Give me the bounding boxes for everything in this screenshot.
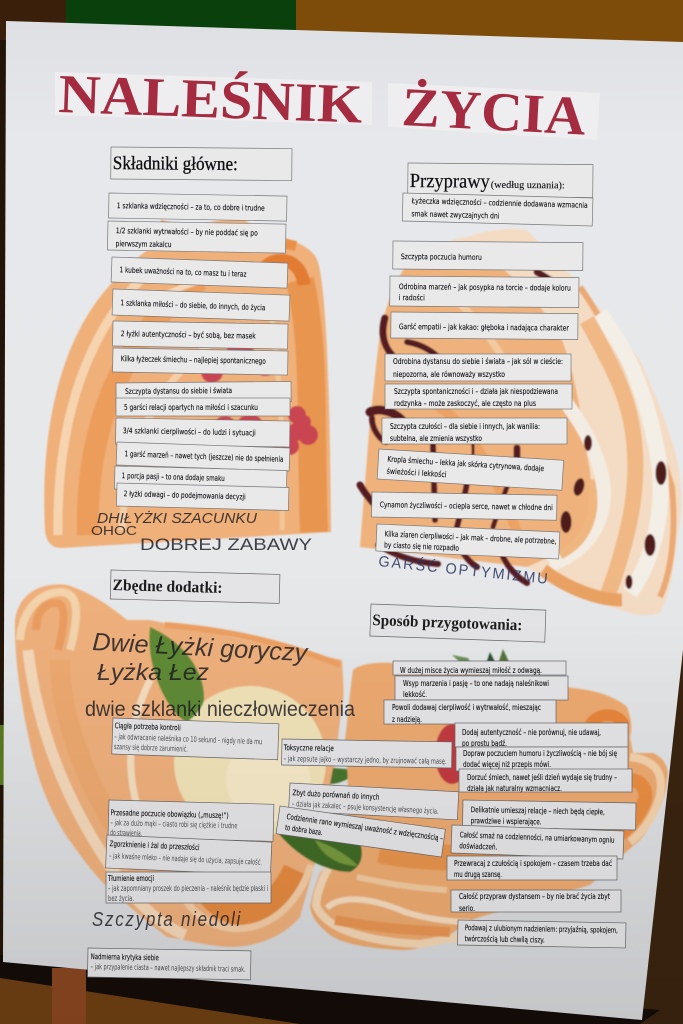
list of bad additions: – jak kwaśne mleko – nie nadaje się do użycia, zapsuje całość. — [109, 851, 262, 867]
spice list: Łyżeczka wdzięczności – codziennie dodawana wzmacnia — [411, 196, 588, 210]
ingredient list: 1 szklanka miłości – do siebie, do innych, do życia — [120, 298, 266, 312]
preparation steps: serio. — [459, 904, 475, 913]
title: NALEŚNIK — [58, 63, 364, 135]
panel: spices — [372, 163, 593, 588]
handwritten notes: Szczypta niedoli — [92, 909, 242, 931]
ingredient list: 2 łyżki odwagi – do podejmowania decyzji — [124, 489, 246, 501]
list of bad additions: – jak przypalenie ciasta – nawet najlepszy składnik traci smak. — [91, 962, 246, 974]
spice list: Szczypta czułości – dla siebie i innych, jak wanilia: — [390, 422, 540, 431]
illustration: bottom-left pancake — [15, 584, 358, 947]
list of bad additions: Zgorzknienie i żal do przeszłości — [109, 839, 200, 852]
handwritten notes: Łyżka Łez — [97, 659, 210, 685]
handwritten additions — [91, 510, 312, 554]
list of bad additions: to dobra baza. — [284, 823, 323, 837]
ingredient list: 1 szklanka wdzięczności – za to, co dobre i trudne — [117, 201, 265, 213]
preparation steps: Dodaj autentyczność – nie porównuj, nie udawaj, — [462, 728, 601, 737]
list of bad additions: Ciągła potrzeba kontroli — [115, 721, 181, 732]
preparation steps: Wsyp marzenia i pasję – to one nadają naleśnikowi — [403, 679, 549, 688]
leaf — [149, 627, 204, 722]
preparation steps: Dopraw poczuciem humoru i życzliwością – nie bój się — [463, 749, 617, 758]
preparation steps: Delikatnie umieszaj relacje – niech będą ciepłe, — [471, 805, 605, 816]
preparation steps: mu drugą szansę. — [454, 870, 502, 879]
preparation steps: po prostu bądź. — [462, 739, 507, 748]
heading: Składniki główne: — [113, 153, 238, 175]
ingredient list: pierwszym zakalcu — [116, 239, 172, 249]
list of bad additions: Przesadne poczucie obowiązku („muszę!”) — [111, 808, 229, 820]
preparation steps: doświadczeń. — [459, 841, 497, 852]
handwritten notes: dwie szklanki nieczłowieczenia — [85, 698, 355, 721]
ingredient list: 1 kubek uważności na to, co masz tu i teraz — [119, 265, 247, 279]
list of bad additions: – jak zapomniany proszek do pieczenia – naleśnik będzie płaski i — [108, 884, 268, 893]
poppy seeds — [560, 435, 666, 589]
preparation steps: Całość smaż na codzienności, na umiarkowanym ogniu — [460, 830, 615, 845]
ingredient list: 1 garść marzeń – nawet tych (jeszcze) nie do spełnienia — [124, 449, 284, 464]
heading — [408, 163, 593, 198]
list of bad additions: – jak za dużo mąki – ciasto robi się ciężkie i trudne — [110, 818, 238, 830]
preparation steps — [384, 661, 636, 948]
strawberry — [435, 724, 469, 784]
title — [55, 63, 600, 147]
ingredient list: 2 łyżki autentyczności – być sobą, bez masek — [121, 329, 256, 341]
list of bad additions — [87, 718, 459, 980]
title: ŻYCIA — [400, 76, 588, 147]
preparation steps: lekkość. — [403, 690, 427, 699]
handwritten additions: DOBREJ ZABAWY — [140, 535, 312, 554]
preparation steps: twórczością lub chwilą ciszy. — [465, 934, 545, 945]
spice list: niepozorna, ale równoważy wszystko — [393, 370, 505, 379]
list of bad additions: – jak zepsute jajko – wystarczy jedno, by zrujnować całą masę. — [284, 754, 447, 766]
list of bad additions: Codziennie rano wymieszaj uważność z wdzięcznością – — [286, 812, 444, 843]
list of bad additions: – jak odwracanie naleśnika co 10 sekund – nigdy nie da mu — [114, 732, 263, 746]
leaf — [276, 830, 362, 872]
preparation steps: działa jak naturalny wzmacniacz. — [467, 784, 562, 793]
ingredient list — [107, 193, 291, 510]
spice list: rodzynka – może zaskoczyć, ale często na plus — [394, 399, 536, 408]
illustration: bottom-right pancake — [276, 649, 668, 950]
list of bad additions: Zbyt dużo porównań do innych — [292, 788, 380, 802]
preparation steps: Podawaj z ulubionym nadzieniem: przyjaźnią, spokojem, — [465, 923, 618, 935]
list of bad additions: – działa jak zakalec – psuje konsystencję własnego życia. — [292, 799, 439, 816]
handwritten additions: DHIŁYŻKI SZACUNKU — [97, 510, 257, 527]
chocolate syrup — [360, 272, 550, 583]
herb — [452, 655, 472, 666]
ingredient list: 1 porcja pasji – to ona dodaje smaku — [122, 471, 225, 483]
spice list: Odrobina dystansu do siebie i świata – jak sól w cieście: — [393, 357, 563, 366]
spice list: Odrobina marzeń – jak posypka na torcie – dodaje koloru — [399, 282, 571, 293]
berries — [201, 341, 318, 455]
ingredient list: Szczypta dystansu do siebie i świata — [125, 386, 232, 396]
preparation steps: W dużej misce życia wymieszaj miłość z odwagą. — [400, 666, 542, 675]
spice list: subtelna, ale zmienia wszystko — [390, 434, 482, 443]
heading: Sposób przygotowania: — [372, 612, 523, 634]
illustration: top-left pancake — [44, 218, 331, 548]
spice list — [372, 193, 593, 559]
spice list: świeżości i lekkości — [386, 467, 447, 479]
list of bad additions: Tłumienie emocji — [107, 874, 154, 883]
handwritten notes: Dwie Łyżki goryczy — [92, 628, 309, 667]
handwritten additions: OHOC — [91, 523, 137, 538]
preparation steps: dodać więcej niż przepis mówi. — [463, 760, 551, 769]
heading — [110, 570, 280, 603]
list of bad additions: do strawienia. — [110, 828, 142, 838]
heading: Przyprawy — [410, 170, 490, 193]
ingredient list: 1/2 szklanki wytrwałości – by nie poddać się po — [116, 226, 258, 238]
list of bad additions: Nadmierna krytyka siebie — [91, 952, 159, 962]
preparation steps: z nadzieją. — [392, 715, 422, 724]
panel: unnecessary additions — [85, 570, 459, 980]
list of bad additions: bez życia. — [108, 894, 134, 903]
spice list: i radości — [399, 293, 425, 302]
ingredient list: 5 garści relacji opartych na miłości i szacunku — [124, 403, 258, 412]
spice list: Cynamon życzliwości – ociepla serce, nawet w chłodne dni — [380, 500, 553, 512]
preparation steps: prawdziwe i wspierające. — [471, 816, 542, 826]
panel: preparation method — [370, 604, 636, 948]
heading — [370, 604, 546, 642]
spice list: Kropla śmiechu – lekka jak skórka cytrynowa, dodaje — [387, 455, 545, 473]
illustration: top-right pancake — [360, 229, 681, 615]
panel: main ingredients — [91, 147, 312, 554]
lemon — [174, 686, 326, 838]
list of bad additions: Toksyczne relacje — [283, 743, 334, 753]
spice list: Kilka ziaren cierpliwości – jak mak – drobne, ale potrzebne, — [384, 529, 557, 546]
spice list: smak nawet zwyczajnych dni — [411, 209, 500, 221]
ingredient list: Kilka łyżeczek śmiechu – najlepiej spontanicznego — [121, 354, 266, 366]
heading: (według uznania): — [491, 180, 565, 191]
list of bad additions: szansy się dobrze zarumienić. — [114, 742, 188, 754]
preparation steps: Dorzuć śmiech, nawet jeśli dzień wydaje się trudny – — [467, 773, 617, 782]
heading — [111, 147, 292, 181]
spice list: Garść empatii – jak kakao: głęboka i nadająca charakter — [399, 322, 570, 333]
spice list: Szczypta poczucia humoru — [401, 252, 482, 262]
ingredient list: 3/4 szklanki cierpliwości – do ludzi i sytuacji — [123, 426, 256, 437]
handwritten notes — [85, 628, 355, 931]
preparation steps: Przewracaj z czułością i spokojem – czasem trzeba dać — [454, 859, 612, 868]
preparation steps: Powoli dodawaj cierpliwość i wytrwałość, mieszając — [392, 703, 541, 712]
handwritten addition: GARŚĆ OPTYMIZMU — [378, 552, 551, 588]
preparation steps: Całość przypraw dystansem – by nie brać życia zbyt — [459, 892, 610, 901]
spice list: by ciasto się nie rozpadło — [384, 540, 459, 553]
heading: Zbędne dodatki: — [112, 577, 223, 597]
spice list: Szczypta spontaniczności i – działa jak niespodziewana — [394, 387, 558, 396]
